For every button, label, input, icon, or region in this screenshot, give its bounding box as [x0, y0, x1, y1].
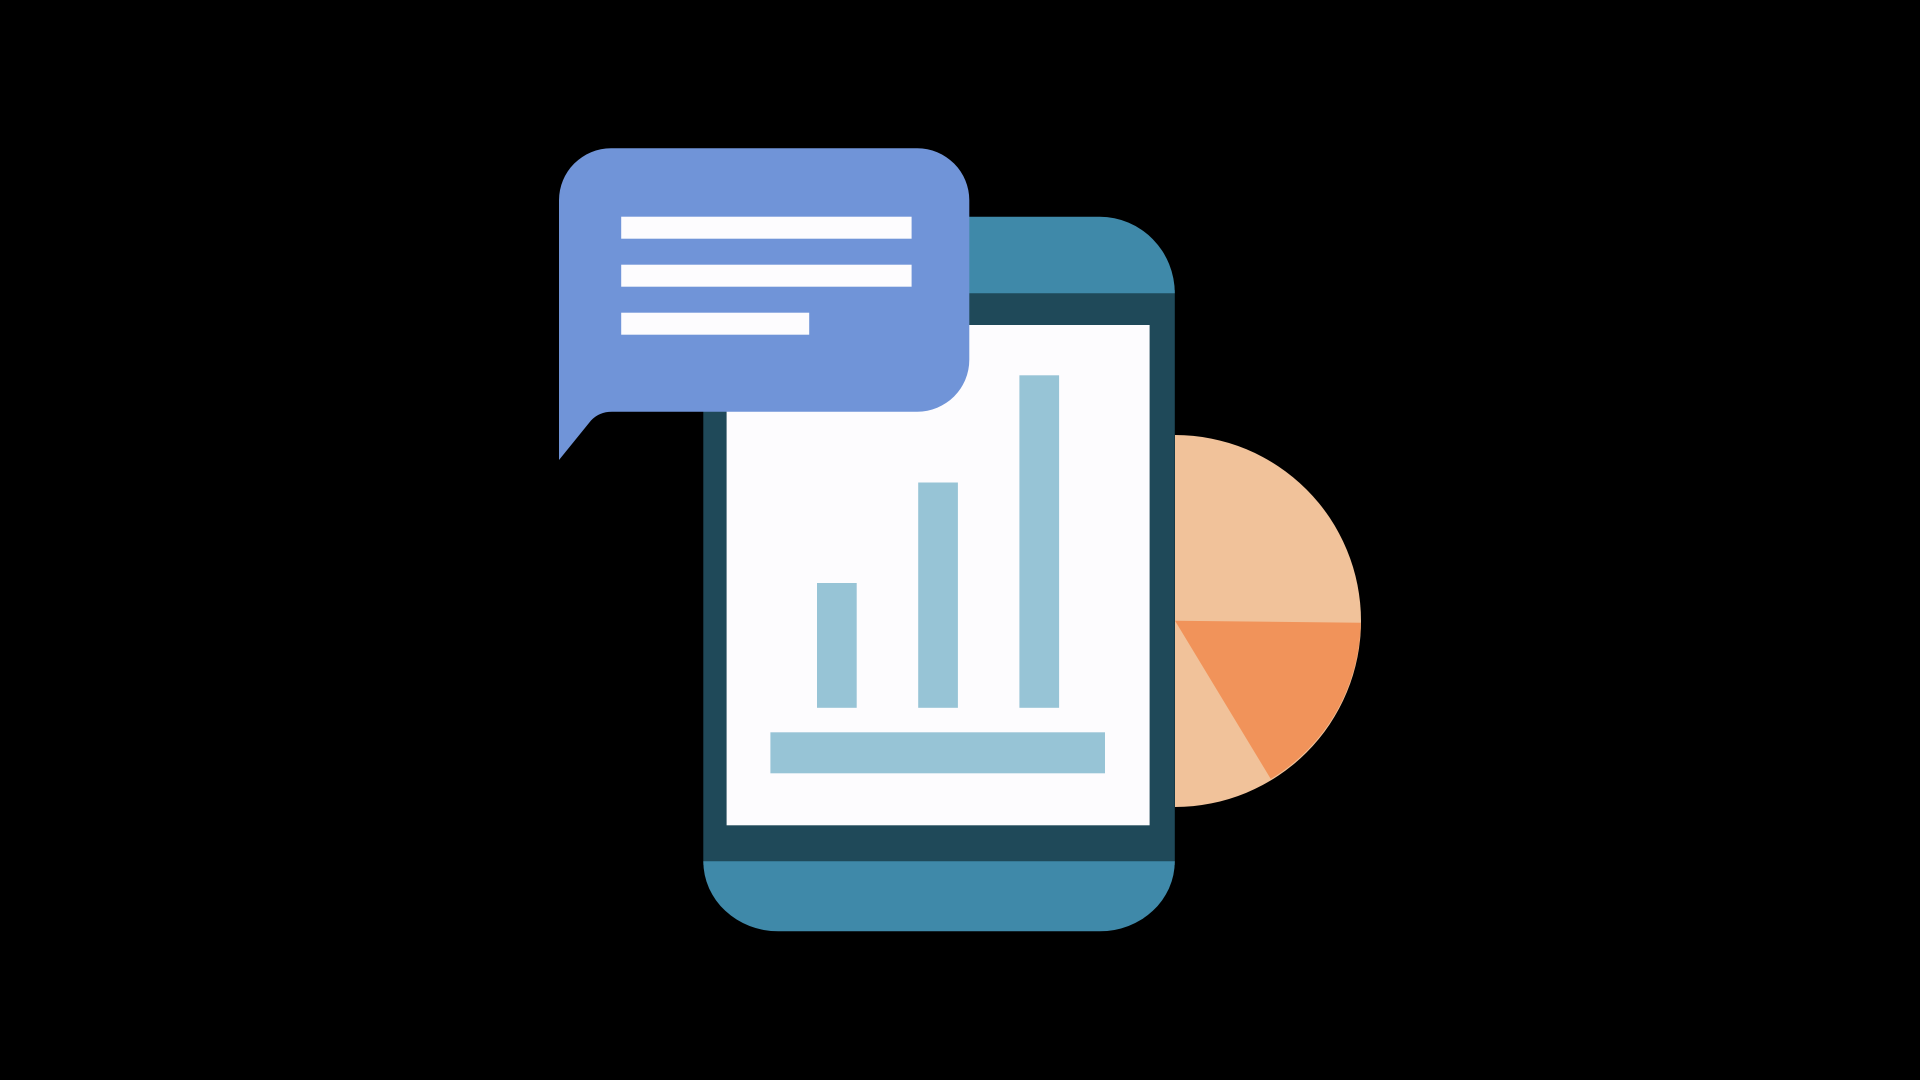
phone body: [703, 290, 1175, 865]
phone bottom band: [703, 861, 1175, 931]
phone: [703, 217, 1175, 931]
bubble shape: [559, 148, 969, 460]
bar: tall: [1019, 375, 1059, 708]
pie: orange slice: [1175, 621, 1361, 779]
speech bubble: [559, 148, 969, 460]
bubble text line 2: [621, 265, 912, 287]
pie: light slices: [1175, 435, 1361, 807]
phone screen: [727, 325, 1150, 825]
bubble text line 3: [621, 313, 809, 335]
chart baseline: [770, 732, 1105, 773]
bar: short: [817, 583, 857, 708]
bar chart: [770, 375, 1105, 773]
phone top band: [703, 217, 1175, 293]
bar: medium: [918, 482, 958, 708]
bubble text line 1: [621, 217, 912, 239]
pie chart: [1175, 435, 1361, 807]
